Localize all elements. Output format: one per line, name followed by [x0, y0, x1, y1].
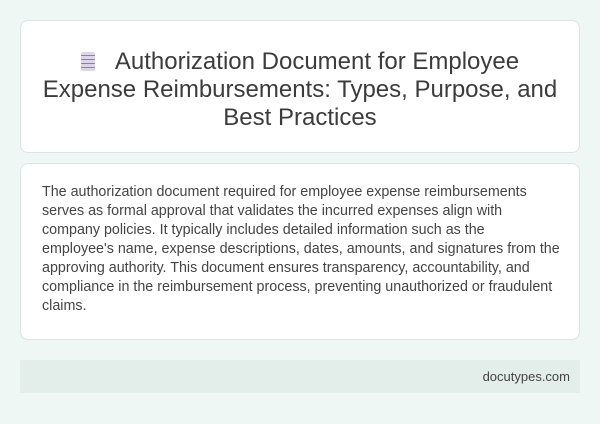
text block: claims. — [42, 298, 86, 314]
icon: document — [81, 52, 95, 71]
footer text: docutypes.com — [483, 369, 570, 384]
panel: description — [20, 163, 580, 340]
text block: The authorization document required for employee expense reimbursements — [42, 184, 527, 200]
panel: header — [20, 20, 580, 153]
text block: employee's name, expense descriptions, dates, amounts, and signatures from the — [42, 241, 560, 257]
text block: compliance in the reimbursement process, preventing unauthorized or fraudulent — [42, 279, 552, 295]
text block — [42, 184, 560, 314]
title — [43, 48, 557, 131]
footer — [20, 360, 580, 393]
text block: serves as formal approval that validates the incurred expenses align with — [42, 203, 502, 219]
title: Expense Reimbursements: Types, Purpose, and — [43, 76, 557, 103]
text block: approving authority. This document ensures transparency, accountability, and — [42, 260, 530, 276]
title: Authorization Document for Employee — [115, 48, 519, 75]
text block: company policies. It typically includes detailed information such as the — [42, 222, 485, 238]
title: Best Practices — [223, 104, 377, 131]
